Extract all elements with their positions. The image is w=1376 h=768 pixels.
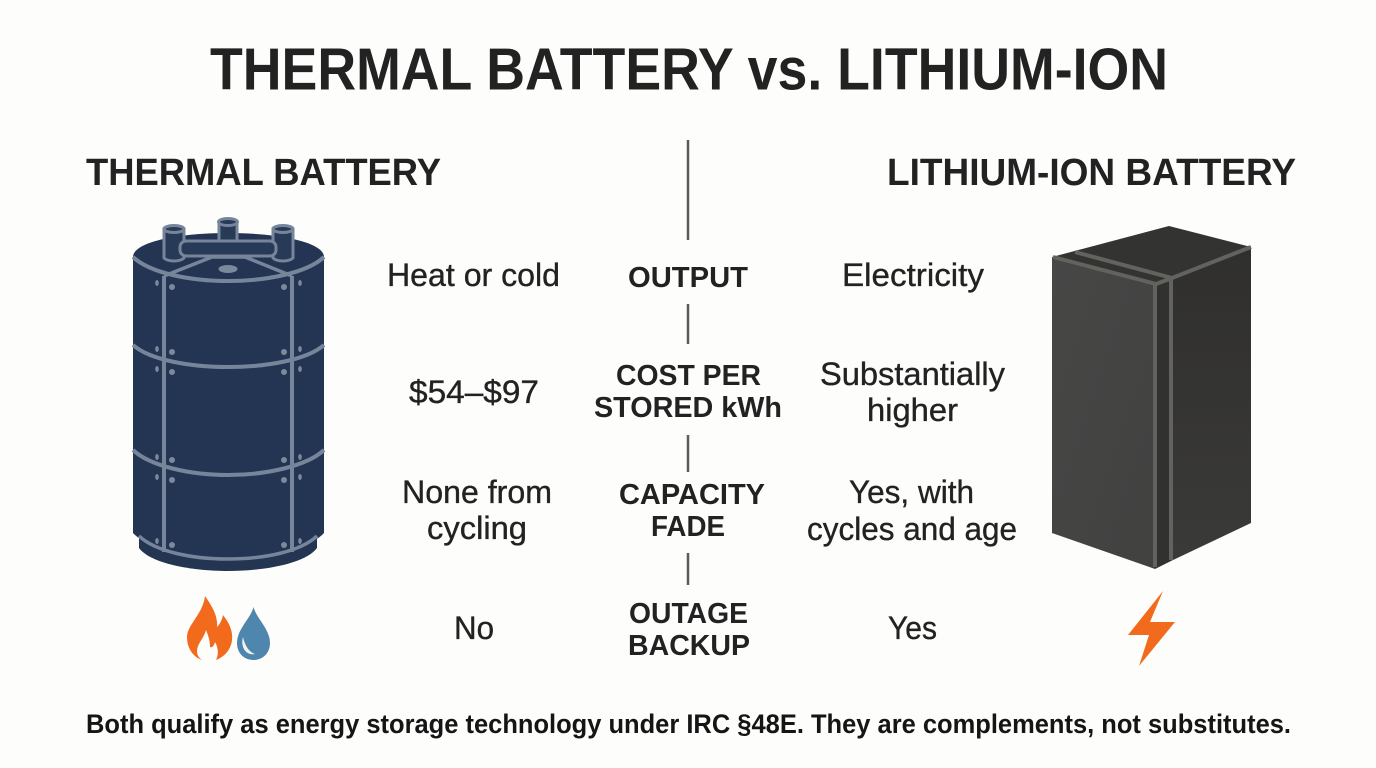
label: STORED kWh — [594, 392, 782, 424]
tank pipes — [164, 218, 293, 261]
lithium value — [807, 474, 1017, 547]
row: outage backup — [454, 598, 937, 662]
title: THERMAL BATTERY vs. LITHIUM-ION — [210, 36, 1168, 102]
block center strip — [1155, 279, 1171, 569]
label: CAPACITY — [619, 479, 765, 511]
lithium value: Yes, with — [849, 474, 974, 510]
block right face — [1171, 247, 1251, 561]
lithium value: Substantially — [820, 356, 1005, 392]
label: OUTPUT — [628, 262, 748, 294]
lithium value: cycles and age — [807, 511, 1017, 547]
lithium value: Electricity — [842, 257, 984, 293]
tank rivets — [155, 280, 302, 548]
center divider — [687, 140, 689, 585]
icon: lithium-ion battery block — [1052, 226, 1251, 569]
label — [619, 479, 765, 543]
label — [628, 598, 750, 662]
thermal value: cycling — [427, 510, 527, 546]
tank skirt — [139, 535, 317, 571]
thermal value: $54–$97 — [409, 374, 539, 410]
icon: thermal battery tank — [133, 218, 324, 571]
label: BACKUP — [628, 630, 750, 662]
row: output — [387, 257, 984, 294]
thermal value: Heat or cold — [387, 257, 560, 293]
tank bands — [133, 257, 324, 559]
label: COST PER — [616, 360, 761, 392]
icon: lightning bolt — [1128, 591, 1175, 666]
label: OUTAGE — [629, 598, 748, 630]
heading: lithium-ion battery: LITHIUM-ION BATTERY — [887, 152, 1296, 194]
thermal value: None from — [402, 474, 552, 510]
lithium value — [820, 356, 1005, 428]
icon: water drop — [237, 607, 270, 660]
label: FADE — [651, 511, 725, 543]
lithium value: higher — [867, 392, 958, 428]
icon: flame — [187, 596, 232, 660]
thermal value: No — [454, 610, 494, 646]
footer note: Both qualify as energy storage technology under IRC §48E. They are complements, not substitutes. — [86, 709, 1291, 739]
label — [594, 360, 782, 424]
thermal value — [402, 474, 552, 546]
row: cost per stored kWh — [409, 356, 1005, 428]
tank top hatch — [218, 265, 238, 273]
block top face — [1052, 226, 1251, 284]
block seams — [1053, 247, 1251, 567]
heading: thermal battery: THERMAL BATTERY — [86, 152, 441, 194]
tank body — [133, 233, 324, 559]
lithium value: Yes — [888, 610, 937, 646]
row: capacity fade — [402, 474, 1017, 547]
block left face — [1052, 257, 1156, 569]
